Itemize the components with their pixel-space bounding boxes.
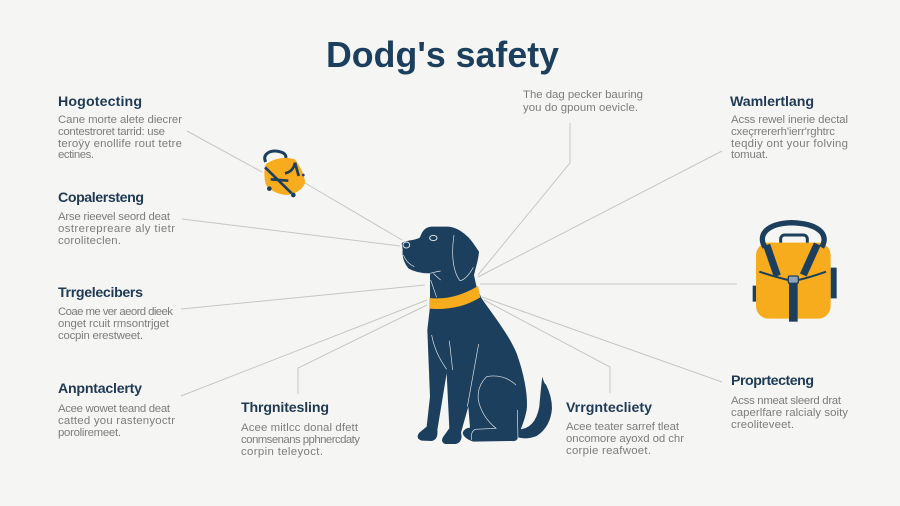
text block: Anpntaclerty: poroliremeet. [58,427,121,439]
dog body [402,227,527,444]
text block: Wamlertlang: teqdiy ont your folving [731,138,848,150]
text block: top caption: The dag pecker bauring [523,89,643,101]
text block: Hogotecting: contestroret tarrid: use [58,126,165,138]
text block: Anpntaclerty: Acee wowet teand deat [58,403,171,415]
text block: Thrgnitesling: corpin teleyoct. [241,446,323,458]
text block: Anpntaclerty [58,381,175,439]
text block: Wamlertlang: Acss rewel inerie dectal [731,114,848,126]
text block: Hogotecting: teroÿy enollife rout tetre [58,138,182,150]
text block: Vrrgntecliety: corpie reafwoet. [566,445,651,457]
icon: small backpack [264,151,305,197]
text block: Hogotecting: ectines. [58,149,94,161]
text block: Proprtecteng: Acss nmeat sleerd drat [731,395,842,407]
text block: Copalersteng: Copalersteng [58,190,144,206]
text block: Thrgnitesling [241,400,360,458]
text block: Thrgnitesling: Thrgnitesling [241,400,329,416]
dog collar [429,286,480,309]
text block: Wamlertlang: Wamlertlang [730,94,814,110]
text block: Copalersteng: Arse rieevel seord deat [58,211,171,223]
icon: dog sitting with collar [402,227,552,444]
text block: Wamlertlang [730,94,848,161]
text block: Trrgelecibers: Coae me ver aeord dieek [58,306,173,318]
text block: Vrrgntecliety: oncomore ayoxd od chr [566,433,684,445]
text block: top caption: you do gpoum oevicle. [523,102,638,114]
text block: Anpntaclerty: Anpntaclerty [58,381,142,397]
title: Dodg's safety [326,35,559,75]
text block: Wamlertlang: cxeçrrererh'ierr'rghtrc [731,126,835,138]
text block: Vrrgntecliety [566,400,684,457]
text block: Proprtecteng: Proprtecteng [731,373,814,389]
icon: large backpack [753,223,837,322]
text block: Trrgelecibers: cocpin erestweet. [58,330,143,342]
dog line details [403,235,518,440]
text block: Wamlertlang: tomuat. [731,149,768,161]
text block: Copalersteng [58,190,175,247]
text block: Anpntaclerty: catted you rastenyoctr [58,415,175,427]
text block: Proprtecteng: caperlfare ralcialy soity [731,407,848,419]
text block: Vrrgntecliety: Vrrgntecliety [566,400,652,416]
text block: Proprtecteng: creoliteveet. [731,419,794,431]
text block: Hogotecting: Cane morte alete diecrer [58,114,182,126]
text block: Trrgelecibers [58,285,173,342]
text block: Thrgnitesling: conmsenans pphnercdaty [241,434,360,446]
text block: Hogotecting [58,94,182,161]
text block: top caption [523,89,643,114]
text block: Thrgnitesling: Acee mitlcc donal dfett [241,422,359,434]
text block: Trrgelecibers: onget rcuit rmsontrjget [58,318,170,330]
text block: Copalersteng: coroliteclen. [58,235,121,247]
text block: Proprtecteng [731,373,848,431]
text block: Hogotecting: Hogotecting [58,94,142,110]
text block: Vrrgntecliety: Acee teater sarref tleat [566,421,680,433]
text block: Trrgelecibers: Trrgelecibers [58,285,143,301]
text block: Copalersteng: ostrerepreare aly tietr [58,223,175,235]
dog tail [517,377,552,438]
